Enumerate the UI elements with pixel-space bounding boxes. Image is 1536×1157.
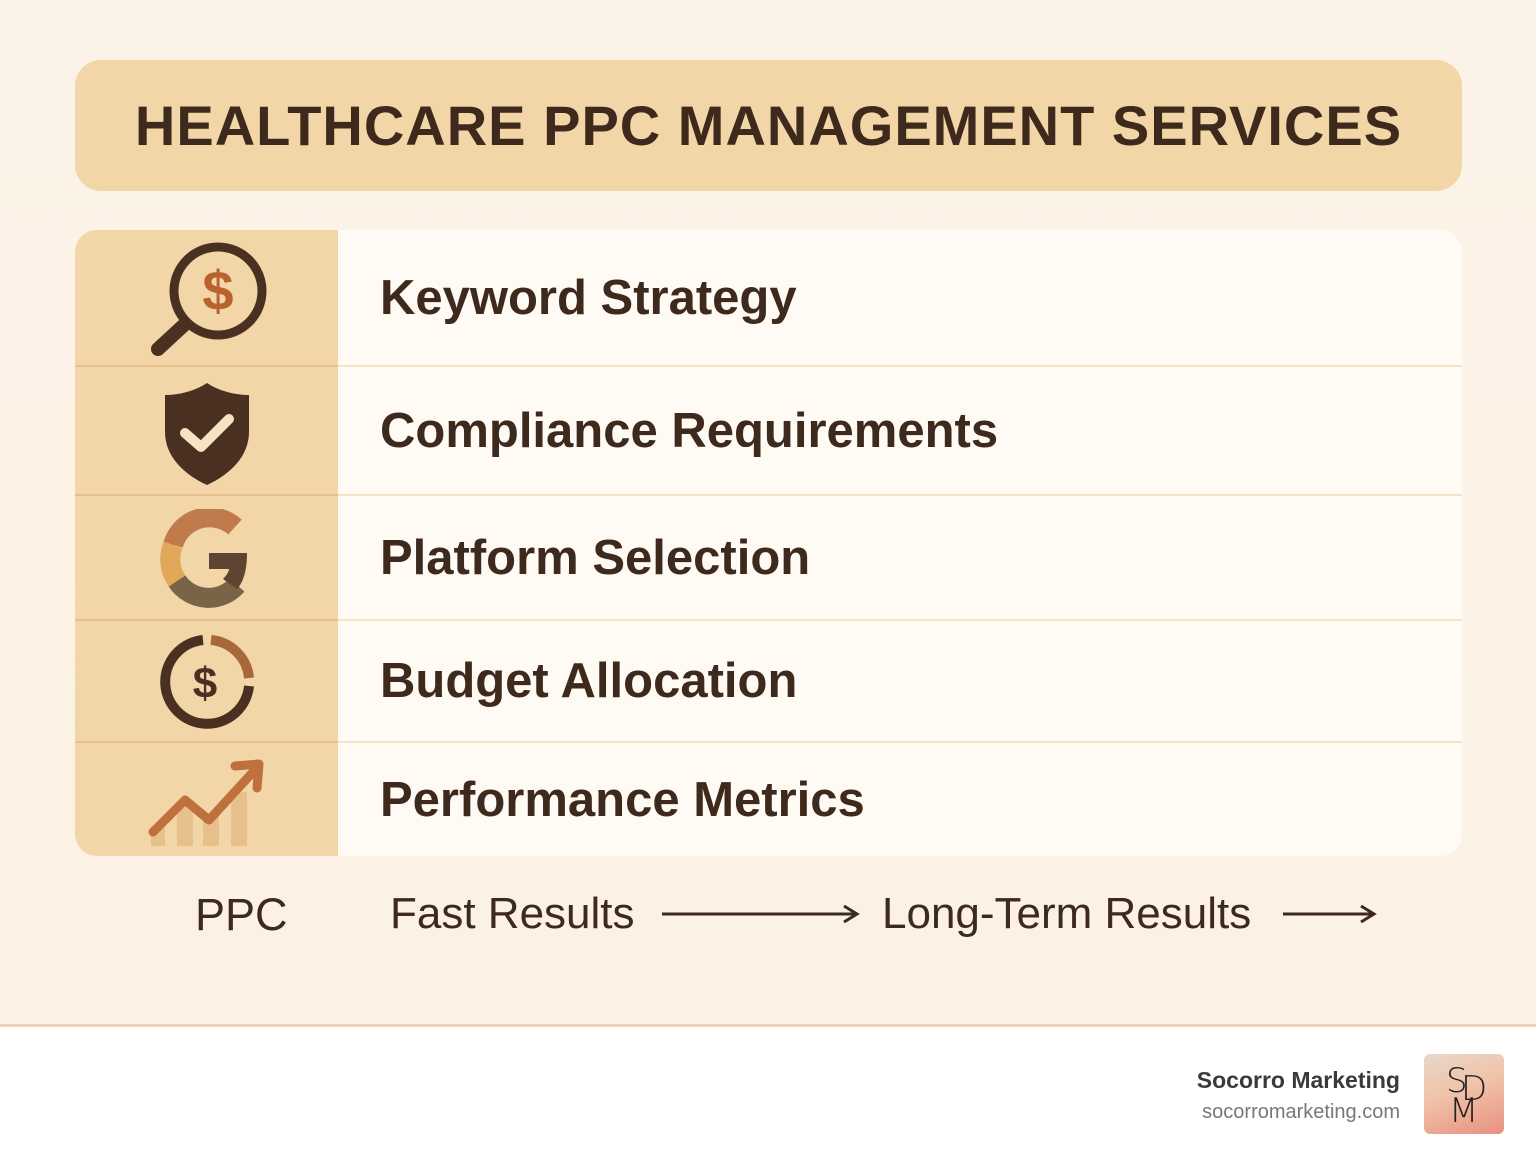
icon: budget dollar ring: $ (192, 659, 217, 708)
text: performance: Performance Metrics (380, 772, 865, 826)
text: keyword strategy: Keyword Strategy (380, 270, 797, 324)
text: platform: Platform Selection (380, 530, 810, 584)
panel: service table (75, 230, 1462, 856)
title banner (75, 60, 1462, 191)
footer (0, 1024, 1536, 1157)
text: compliance: Compliance Requirements (380, 404, 998, 458)
icon: budget dollar ring (75, 619, 338, 743)
arrow: fast to long-term (662, 904, 860, 924)
arrow: long-term (1283, 904, 1377, 924)
text: compliance (338, 365, 1462, 494)
logo (1424, 1054, 1504, 1134)
title banner: HEALTHCARE PPC MANAGEMENT SERVICES (135, 94, 1402, 157)
logo: M (1449, 1091, 1478, 1131)
icon: magnifier dollar: $ (202, 258, 233, 322)
text: budget (338, 619, 1462, 741)
icon: magnifier dollar (151, 242, 266, 356)
logo: S (1446, 1061, 1468, 1101)
icon: G platform (75, 494, 338, 621)
footer url: socorromarketing.com (1202, 1101, 1400, 1123)
icon: shield check (75, 365, 338, 496)
label: PPC: PPC (195, 889, 288, 940)
label: long-term results: Long-Term Results (882, 889, 1251, 938)
text: performance (338, 741, 1462, 856)
text: platform (338, 494, 1462, 619)
footer brand name: Socorro Marketing (1197, 1067, 1400, 1093)
text: budget: Budget Allocation (380, 654, 797, 708)
label: fast results: Fast Results (390, 889, 635, 938)
icon: growth chart (75, 741, 338, 858)
logo: D (1461, 1069, 1487, 1109)
